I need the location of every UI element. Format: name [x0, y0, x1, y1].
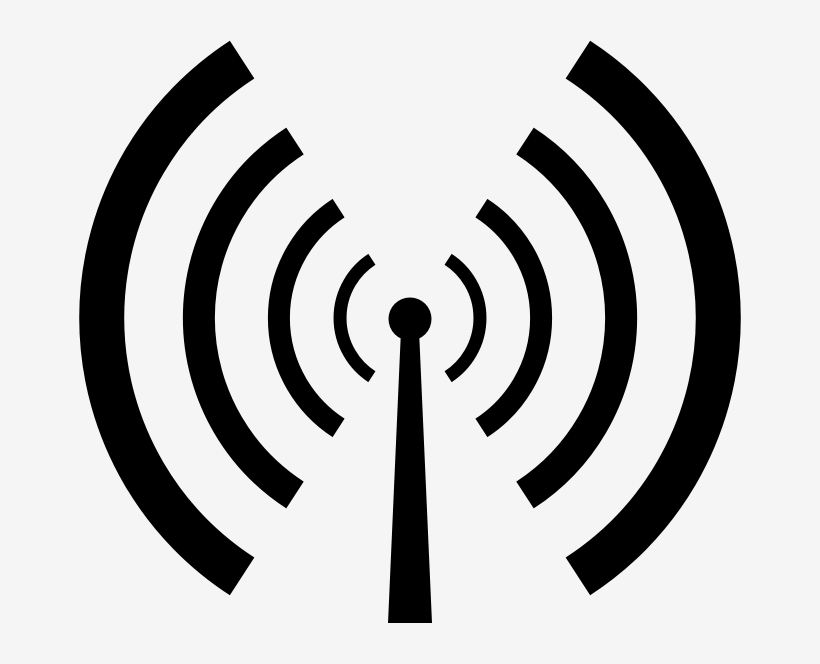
wave ring 4 — [102, 60, 718, 576]
wave ring 3 — [199, 141, 621, 495]
wave ring 1 — [340, 259, 480, 377]
wave ring 2 — [279, 208, 541, 428]
icon: antenna waves — [102, 60, 718, 576]
icon: antenna mast — [388, 298, 432, 623]
